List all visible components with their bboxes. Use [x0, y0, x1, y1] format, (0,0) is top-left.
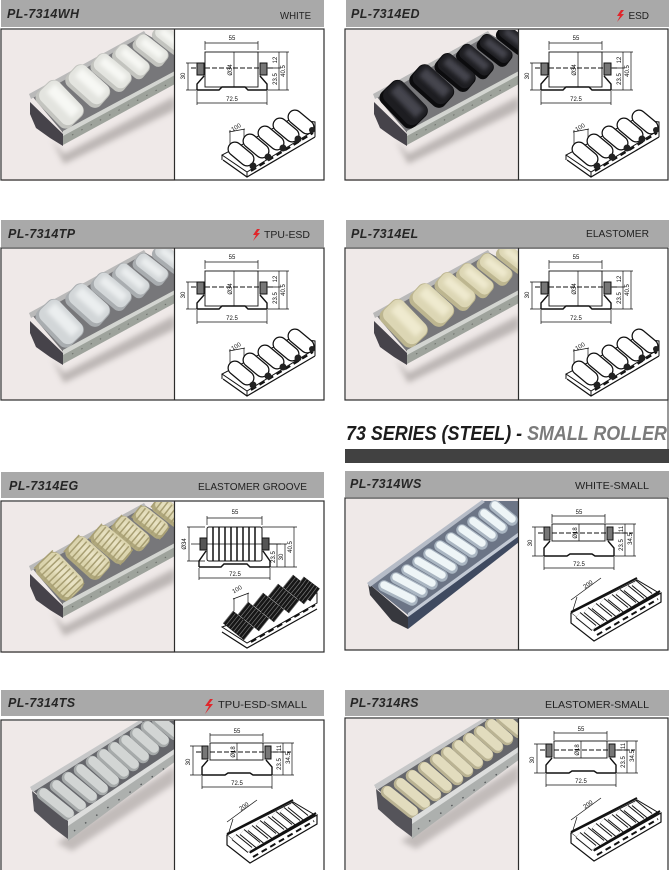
panel: PL-7314EG — [1, 472, 324, 653]
cross-section drawing: 30 — [525, 291, 531, 298]
header bar: PL-7314WS — [345, 471, 669, 497]
divider — [174, 248, 176, 400]
cross-section drawing: 12 — [617, 56, 623, 63]
cross-section drawing: 55 — [229, 255, 236, 261]
colour label with ESD bolt: ESD — [628, 11, 649, 22]
cross-section drawing: 23.5 — [619, 539, 625, 551]
cross-section drawing: Ø34 — [228, 283, 234, 295]
model name: PL-7314TS — [8, 696, 76, 710]
colour label with ESD bolt — [205, 699, 307, 714]
cross-section drawing: Ø34 — [228, 64, 234, 76]
photo: white rollers — [2, 22, 188, 181]
panel: PL-7314WH — [1, 0, 324, 181]
panel: PL-7314TS — [1, 690, 324, 870]
cross-section drawing: 30 — [525, 72, 531, 79]
cross-section drawing: 40.5 — [625, 284, 631, 296]
cross-section drawing: 40.5 — [281, 284, 287, 296]
panel: PL-7314WS — [345, 471, 669, 650]
cross-section drawing: 72.5 — [570, 316, 582, 322]
photo: cream rollers — [346, 241, 532, 400]
colour label: WHITE — [280, 11, 311, 22]
isometric drawing: 100 — [575, 342, 587, 352]
divider — [174, 29, 176, 180]
cross-section drawing: 23.5 — [617, 73, 623, 85]
cross-section drawing: 72.5 — [575, 779, 587, 785]
frame — [1, 501, 324, 652]
cross-section drawing: 55 — [234, 729, 241, 735]
cross-section drawing: 23.5 — [617, 292, 623, 304]
cross-section drawing: 55 — [573, 36, 580, 42]
cross-section drawing: Ø34 — [572, 64, 578, 76]
model name: PL-7314EL — [351, 227, 419, 241]
cross-section drawing — [525, 36, 633, 105]
cross-section drawing — [525, 255, 633, 324]
colour label: WHITE-SMALL — [575, 481, 649, 492]
model name: PL-7314EG — [9, 479, 79, 493]
isometric drawing — [566, 336, 659, 396]
isometric drawing: 100 — [575, 123, 587, 133]
cross-section drawing: grooved: 30 — [279, 553, 285, 560]
isometric drawing — [566, 117, 659, 177]
header bar: PL-7314RS — [345, 690, 669, 716]
divider — [518, 29, 520, 180]
colour label with ESD bolt — [617, 10, 649, 22]
cross-section drawing: 23.5 — [277, 758, 283, 770]
isometric drawing: 200 — [583, 579, 595, 591]
cross-section drawing: grooved: 55 — [232, 510, 239, 516]
photo: black rollers — [346, 22, 532, 181]
cross-section drawing: 34.5 — [628, 533, 634, 545]
cross-section drawing: grooved — [182, 510, 297, 580]
photo: grey small rollers — [2, 719, 176, 870]
photo: light grey rollers — [2, 241, 188, 400]
cross-section drawing — [181, 36, 289, 105]
model name: PL-7314WH — [7, 7, 80, 21]
cross-section drawing — [528, 510, 636, 570]
cross-section drawing: 55 — [578, 727, 585, 733]
colour label with ESD bolt: TPU-ESD-SMALL — [218, 700, 307, 711]
isometric drawing: 200 — [583, 799, 595, 811]
isometric drawing — [222, 117, 315, 177]
colour label: ELASTOMER-SMALL — [545, 700, 649, 711]
frame — [1, 29, 324, 180]
cross-section drawing: 12 — [273, 275, 279, 282]
cross-section drawing — [186, 729, 294, 789]
isometric drawing: 100 — [231, 342, 243, 352]
photo: grooved cream rollers — [2, 494, 188, 653]
isometric drawing: grooved — [222, 581, 317, 648]
cross-section drawing: 23.5 — [273, 73, 279, 85]
colour label with ESD bolt: TPU-ESD — [264, 230, 310, 241]
cross-section drawing: 34.5 — [630, 750, 636, 762]
cross-section drawing: 30 — [530, 756, 536, 763]
cross-section drawing: 55 — [576, 510, 583, 516]
panel: PL-7314ED — [345, 0, 669, 181]
divider — [518, 248, 520, 400]
cross-section drawing: Ø18 — [231, 746, 237, 758]
cross-section drawing: grooved: 40.5 — [288, 541, 294, 553]
cross-section drawing: 40.5 — [625, 65, 631, 77]
cross-section drawing: grooved: 23.5 — [271, 551, 277, 563]
panel: PL-7314TP — [1, 220, 324, 400]
frame — [1, 248, 324, 400]
isometric drawing: 100 — [231, 123, 243, 133]
panel: PL-7314RS — [345, 690, 669, 870]
cross-section drawing: 55 — [229, 36, 236, 42]
header bar: PL-7314TS — [1, 690, 324, 716]
cross-section drawing — [530, 727, 638, 787]
cross-section drawing: grooved: Ø34 — [182, 538, 188, 550]
model name: PL-7314ED — [351, 7, 420, 21]
photo: cream small rollers — [346, 717, 520, 870]
cross-section drawing — [181, 255, 289, 324]
cross-section drawing: Ø18 — [575, 744, 581, 756]
cross-section drawing: 72.5 — [226, 97, 238, 103]
cross-section drawing: 11 — [621, 742, 627, 749]
cross-section drawing: 40.5 — [281, 65, 287, 77]
cross-section drawing: 72.5 — [570, 97, 582, 103]
divider — [518, 718, 520, 870]
cross-section drawing: 30 — [528, 539, 534, 546]
header bar: PL-7314WH — [1, 0, 324, 27]
colour label: ELASTOMER — [586, 229, 649, 240]
cross-section drawing: 23.5 — [621, 756, 627, 768]
cross-section drawing: 34.5 — [286, 752, 292, 764]
model name: PL-7314WS — [350, 477, 422, 491]
header bar: PL-7314EL — [346, 220, 669, 247]
cross-section drawing: 72.5 — [231, 781, 243, 787]
isometric drawing — [571, 578, 661, 641]
cross-section drawing: 11 — [277, 744, 283, 751]
cross-section drawing: 12 — [273, 56, 279, 63]
cross-section drawing: 30 — [186, 758, 192, 765]
cross-section drawing: grooved: 72.5 — [229, 572, 241, 578]
frame — [1, 720, 324, 870]
header bar: PL-7314EG — [1, 472, 324, 498]
cross-section drawing: 12 — [617, 275, 623, 282]
model name: PL-7314RS — [350, 696, 419, 710]
panel: PL-7314EL — [345, 220, 669, 400]
isometric drawing — [222, 336, 315, 396]
section title band — [345, 449, 669, 463]
photo: white small rollers — [346, 499, 519, 650]
model name: PL-7314TP — [8, 227, 76, 241]
cross-section drawing: Ø34 — [572, 283, 578, 295]
cross-section drawing: 30 — [181, 72, 187, 79]
frame — [345, 718, 668, 870]
isometric drawing — [571, 798, 661, 861]
cross-section drawing: 30 — [181, 291, 187, 298]
divider — [174, 720, 176, 870]
divider — [174, 501, 176, 652]
cross-section drawing: 55 — [573, 255, 580, 261]
cross-section drawing: Ø18 — [573, 527, 579, 539]
header bar: PL-7314ED — [346, 0, 669, 27]
isometric drawing — [227, 800, 317, 863]
cross-section drawing: 23.5 — [273, 292, 279, 304]
cross-section drawing: 11 — [619, 525, 625, 532]
frame — [345, 248, 668, 400]
isometric drawing: 200 — [239, 801, 251, 813]
header bar: PL-7314TP — [1, 220, 324, 247]
frame — [345, 498, 668, 650]
colour label: ELASTOMER GROOVE — [198, 482, 307, 493]
isometric drawing: grooved: 100 — [232, 585, 244, 595]
cross-section drawing: 72.5 — [573, 562, 585, 568]
divider — [518, 498, 520, 650]
frame — [345, 29, 668, 180]
cross-section drawing: 72.5 — [226, 316, 238, 322]
